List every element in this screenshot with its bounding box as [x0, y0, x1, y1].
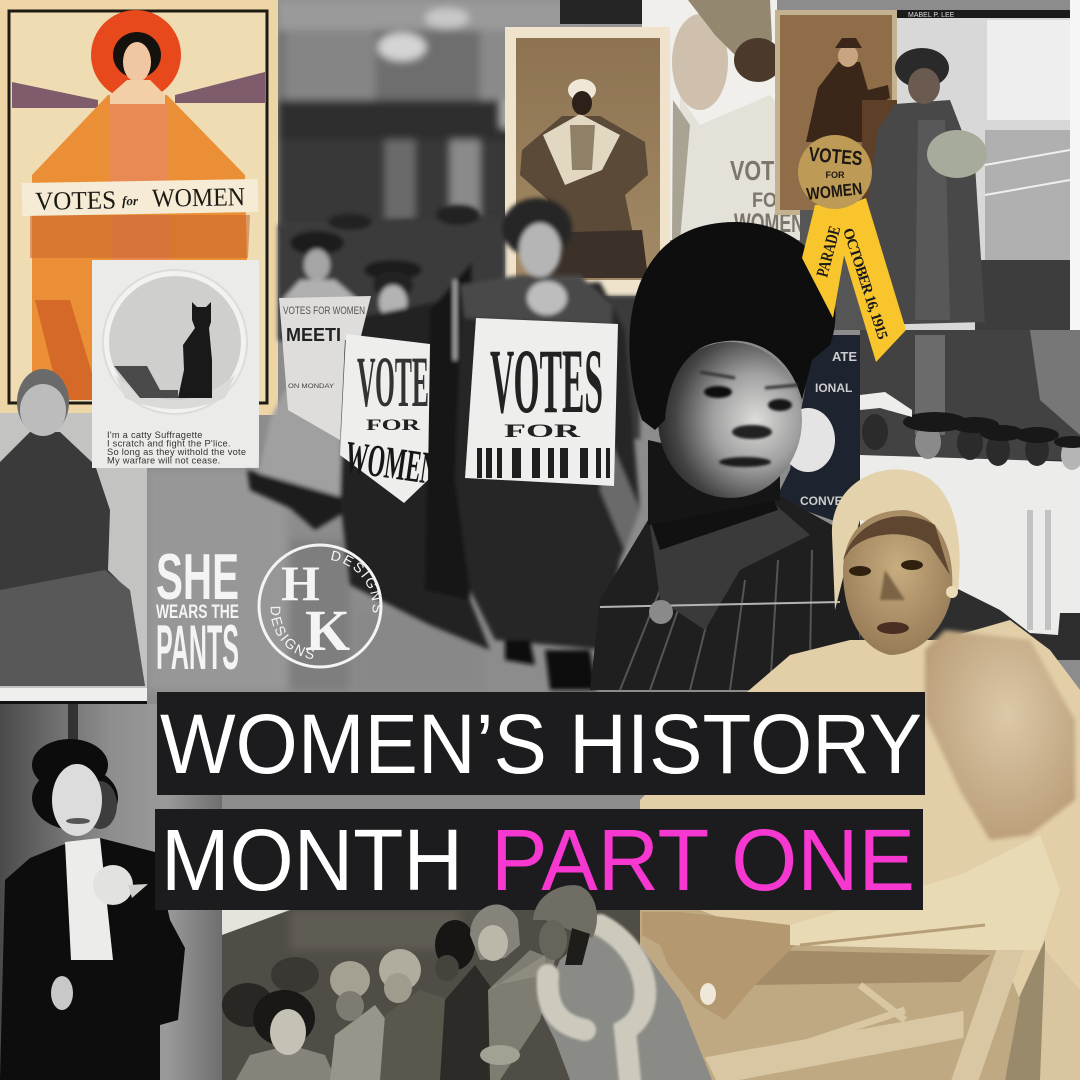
sixth woman face — [539, 920, 567, 960]
hat and face — [895, 48, 949, 88]
third woman — [380, 990, 446, 1080]
face — [658, 342, 802, 498]
hair — [83, 781, 117, 829]
purple wings banner — [12, 72, 265, 108]
mabel figure coat — [868, 100, 985, 325]
icon: votes for women button and ribbons: FOR — [826, 170, 845, 180]
postcard verse: I'm a catty Suffragette — [107, 430, 203, 440]
face — [52, 764, 102, 836]
text: VOTES — [490, 330, 603, 432]
back lettering: FOR — [752, 189, 790, 212]
white fur stole — [548, 925, 645, 1080]
icon: black cat — [178, 302, 212, 398]
hk designs logo — [258, 544, 382, 668]
left marcher hat, face and torso — [290, 231, 344, 255]
panel: portrait of woman in dark jacket — [0, 369, 147, 704]
orange robed figure — [32, 95, 250, 400]
postcard verse — [107, 430, 246, 466]
postcard verse: My warfare will not cease. — [107, 456, 220, 466]
row of white uniforms — [860, 455, 1080, 635]
head and hair — [113, 32, 161, 78]
back lettering — [730, 155, 804, 238]
hk designs logo: DESIGNS — [331, 550, 382, 612]
fur collar — [925, 630, 1075, 840]
panel: woman with votes for women sash on back — [642, 0, 814, 240]
hair — [629, 222, 836, 430]
backdrop behind chair — [640, 910, 1020, 1080]
banner lettering: CONVENT — [800, 494, 859, 508]
middle marcher coat — [340, 300, 490, 650]
lower coat right edge — [1040, 950, 1080, 1080]
poster banner: for — [122, 193, 139, 208]
top hat — [32, 739, 108, 791]
back lettering: VOTES — [730, 155, 803, 186]
seated figure — [520, 116, 648, 278]
sixth woman hair — [565, 928, 590, 965]
back row man and hats — [222, 983, 274, 1027]
ribbon: date — [843, 198, 906, 362]
left marcher skirt — [258, 390, 360, 503]
coat sleeve — [790, 835, 1060, 950]
second woman — [330, 1005, 390, 1080]
middle marcher head — [364, 260, 422, 280]
icon: votes for women button and ribbons: WOMEN — [806, 179, 863, 204]
middle placard — [340, 334, 440, 503]
crowd background — [278, 215, 640, 440]
rear placard — [279, 296, 371, 440]
title line two: PART ONE — [491, 812, 915, 909]
fifth woman hat — [470, 905, 520, 960]
crate and books — [114, 366, 178, 398]
mabel caption: MABEL P. LEE — [908, 12, 955, 19]
front placard: FOR — [504, 421, 581, 442]
panel: catty suffragette postcard — [92, 260, 259, 468]
poster banner: WOMEN — [152, 182, 245, 213]
panel: sepia portrait of woman leaning — [775, 10, 897, 215]
ring — [700, 983, 716, 1005]
turban and face — [832, 469, 960, 610]
panel: sojourner truth carte de visite — [505, 27, 670, 296]
women in white group photo — [860, 330, 1080, 660]
coat body — [640, 620, 1080, 1080]
front marcher fur hat and face — [502, 198, 572, 258]
front placard — [465, 318, 618, 486]
neck — [648, 440, 780, 525]
icon: red sun halo — [91, 10, 181, 100]
white carnation — [93, 865, 133, 905]
fifth woman scarf and coat — [488, 950, 555, 1080]
sepia backdrop right of chair — [1005, 940, 1045, 1080]
marchers with votes placards: VOTE — [357, 342, 429, 422]
portrait of josephine baker in fur coat — [640, 469, 1080, 1080]
icon: votes for women button and ribbons: OCTOBER 16, 1915 — [839, 226, 890, 342]
rear placard: MEETI — [286, 325, 341, 345]
dress — [590, 496, 860, 690]
icon: votes for women button and ribbons: VOTES — [808, 144, 863, 170]
hand — [51, 976, 73, 1010]
arm and hand — [642, 912, 795, 1020]
hk designs logo: K — [305, 598, 350, 663]
sixth woman hat — [533, 885, 597, 938]
middle placard: WOMEN — [342, 431, 440, 494]
she wears the pants logo — [156, 540, 239, 683]
wicker seat — [755, 950, 990, 985]
hk designs logo: DESIGNS — [270, 606, 314, 659]
icon: votes for women button and ribbons — [798, 135, 906, 362]
banner lettering — [800, 349, 859, 508]
shirt — [65, 838, 113, 960]
front left woman — [236, 1048, 332, 1080]
bottom group photo of women — [222, 885, 712, 1080]
portrait of marlene dietrich in top hat — [0, 704, 222, 1080]
facial features — [700, 372, 798, 467]
text: PANTS — [156, 613, 239, 683]
postcard verse: So long as they withold the vote — [107, 447, 246, 457]
banner lettering: ATE — [832, 349, 857, 364]
title line two: MONTH — [161, 812, 463, 909]
panel: mabel lee photograph — [800, 0, 1080, 330]
panel: votes for women poster — [0, 0, 278, 415]
rear placard: VOTES FOR WOMEN — [283, 305, 365, 317]
she wears the pants logo: SHE — [156, 540, 239, 613]
faces and hats — [862, 412, 1080, 470]
sixth woman coat and fur — [540, 925, 712, 1080]
gloves and hands — [480, 1045, 520, 1065]
flower bouquet — [927, 130, 987, 178]
banner lettering: IONAL — [815, 381, 852, 395]
beaded collar — [650, 500, 810, 630]
middle placard: FOR — [366, 417, 421, 434]
icon: votes for women button and ribbons: PARADE — [813, 224, 844, 279]
poster banner: VOTES — [35, 185, 116, 216]
postcard verse: I scratch and fight the P'lice. — [107, 438, 231, 448]
state convention banner — [775, 335, 860, 530]
poster banner — [22, 179, 258, 216]
front marcher coat and skirt — [455, 282, 640, 650]
she wears the pants logo: WEARS THE — [156, 602, 239, 623]
fourth woman in dark hat — [440, 965, 491, 1080]
black jacket — [0, 838, 185, 1080]
button — [798, 135, 872, 209]
title line one: WOMEN’S HISTORY — [160, 697, 922, 791]
portrait of ida b wells — [590, 222, 860, 690]
title line two — [155, 809, 923, 910]
back lettering: WOMEN — [734, 208, 804, 238]
hk designs logo: H — [281, 555, 320, 611]
ribbon: parade — [802, 205, 865, 318]
marchers with votes placards — [247, 198, 640, 690]
rear placard: ON MONDAY — [288, 384, 334, 390]
wicker chair frame — [710, 950, 1020, 1080]
